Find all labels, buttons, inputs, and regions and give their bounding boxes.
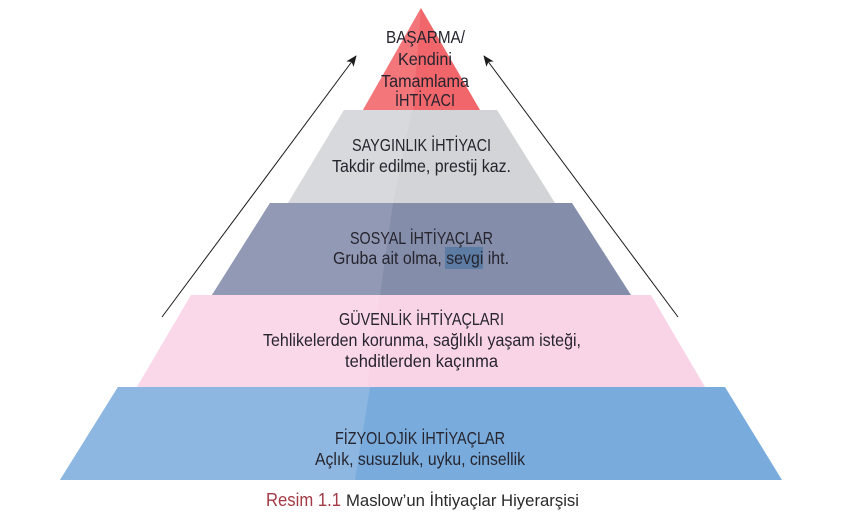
panel: physiological tier: Açlık, susuzluk, uyku, cinsellik [315,449,525,469]
panel: safety tier: GÜVENLİK İHTİYAÇLARI [339,309,504,329]
panel: safety tier: Tehlikelerden korunma, sağlıklı yaşam isteği, [263,330,581,350]
panel: esteem tier: SAYGINLIK İHTİYACI [352,135,491,155]
panel: self-actualization tier [363,8,480,110]
panel: social tier [212,203,631,295]
panel: safety tier [137,295,705,387]
panel: self-actualization tier: İHTİYACI [395,90,455,110]
caption: Resim 1.1 [266,490,341,510]
panel: physiological tier: FİZYOLOJİK İHTİYAÇLAR [335,428,505,448]
panel: physiological tier [60,387,782,480]
panel: safety tier: tehditlerden kaçınma [345,351,498,371]
panel: esteem tier: Takdir edilme, prestij kaz. [332,156,511,176]
panel: self-actualization tier: Kendini [398,49,452,69]
caption: Maslow’un İhtiyaçlar Hiyerarşisi [346,491,579,510]
panel: esteem tier [288,110,555,203]
highlight: sevgi [445,247,483,269]
arrow: left upward [162,56,356,317]
arrow: right upward [484,56,678,317]
caption [266,490,579,510]
panel: self-actualization tier: BAŞARMA/ [386,27,465,47]
panel: social tier: Gruba ait olma, sevgi iht. [333,248,509,268]
panel: self-actualization tier: Tamamlama [381,71,469,91]
panel: social tier: SOSYAL İHTİYAÇLAR [350,228,493,248]
